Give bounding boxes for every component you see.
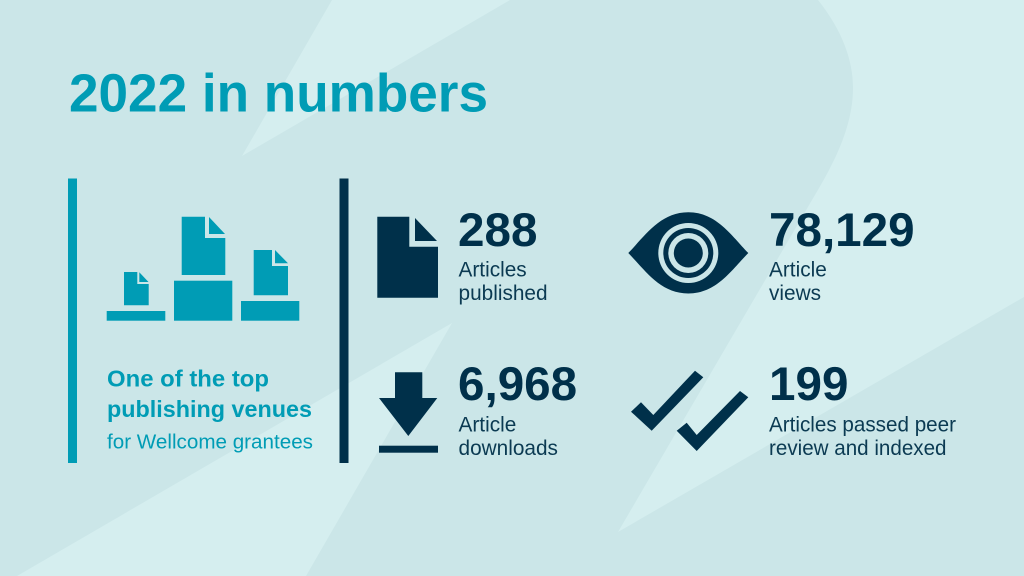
label: articles published: published bbox=[458, 282, 548, 305]
venue text: One of the top bbox=[107, 366, 269, 392]
label: articles passed peer review bbox=[769, 414, 956, 460]
stat: articles published bbox=[377, 204, 548, 305]
number: 288: 288 bbox=[458, 204, 537, 257]
label: article views bbox=[769, 258, 827, 305]
stat: article downloads bbox=[379, 358, 577, 460]
label: articles passed peer review: review and indexed bbox=[769, 437, 946, 460]
number: 199: 199 bbox=[769, 358, 848, 411]
label: article views: Article bbox=[769, 258, 827, 282]
icon: eye bbox=[628, 212, 748, 294]
icon: double check marks bbox=[631, 371, 748, 451]
icon: documents on podium bbox=[107, 217, 299, 321]
number: 6,968: 6,968 bbox=[458, 358, 577, 411]
panel: top publishing venue bbox=[68, 178, 313, 463]
label: articles published: Articles bbox=[458, 258, 527, 282]
label: article downloads: Article bbox=[458, 414, 516, 436]
stat: peer reviewed bbox=[631, 358, 956, 460]
centre divider bar bbox=[340, 178, 348, 463]
venue text: publishing venues bbox=[107, 396, 312, 422]
icon: download arrow bbox=[379, 372, 438, 453]
label: article downloads bbox=[458, 414, 558, 460]
title: 2022 in numbers bbox=[69, 64, 488, 124]
label: articles passed peer review: Articles passed peer bbox=[769, 414, 956, 436]
venue text bbox=[107, 366, 313, 454]
venue text: for Wellcome grantees bbox=[107, 430, 313, 454]
left divider bar bbox=[68, 178, 77, 463]
label: article views: views bbox=[769, 282, 821, 305]
icon: document bbox=[377, 217, 438, 298]
label: articles published bbox=[458, 258, 548, 305]
number: 78,129: 78,129 bbox=[769, 204, 915, 257]
stat: article views bbox=[628, 204, 915, 305]
label: article downloads: downloads bbox=[458, 437, 558, 460]
